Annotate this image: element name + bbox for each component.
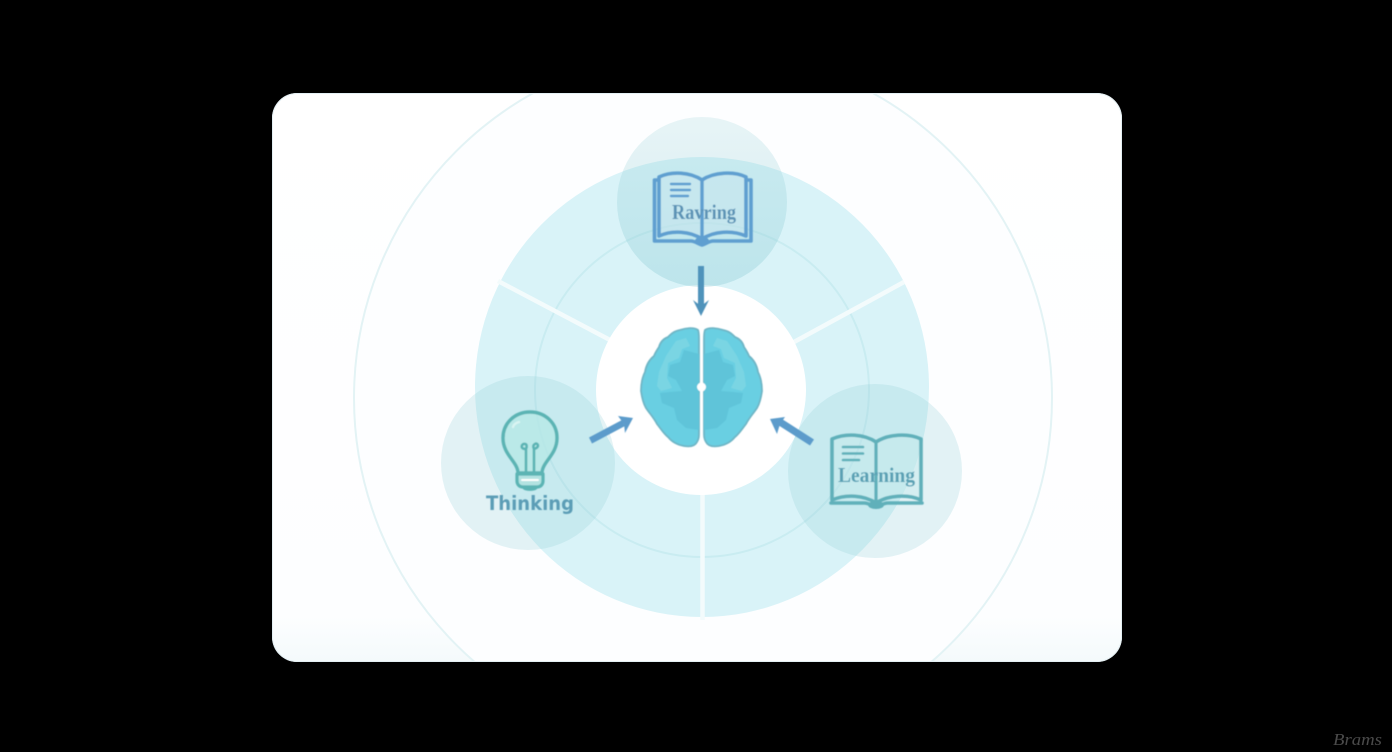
inner ring <box>535 223 869 557</box>
node circle: learning <box>788 384 962 558</box>
icon: open book (learning) <box>831 435 922 509</box>
infographic canvas <box>272 93 1382 745</box>
watermark: Brams <box>1333 730 1382 749</box>
label: Learning: Learning <box>838 463 915 487</box>
icon: brain <box>641 328 762 446</box>
arrow: reading to brain <box>693 266 709 316</box>
icon: open book (reading) <box>654 173 751 246</box>
arrow: learning to brain <box>770 417 814 446</box>
panel: card <box>272 93 1122 662</box>
white centre disc <box>596 285 806 495</box>
icon: light bulb <box>503 412 557 490</box>
arrow: thinking to brain <box>589 416 633 444</box>
panel edge <box>272 94 1122 662</box>
node circle: thinking <box>441 376 615 550</box>
node circle: reading <box>617 117 787 287</box>
outer ring <box>353 94 1053 661</box>
segment dividers <box>498 281 904 620</box>
label: Thinking: Thinking <box>486 492 574 515</box>
light blue disc <box>475 157 929 617</box>
label: Ravring: Ravring <box>672 200 736 224</box>
